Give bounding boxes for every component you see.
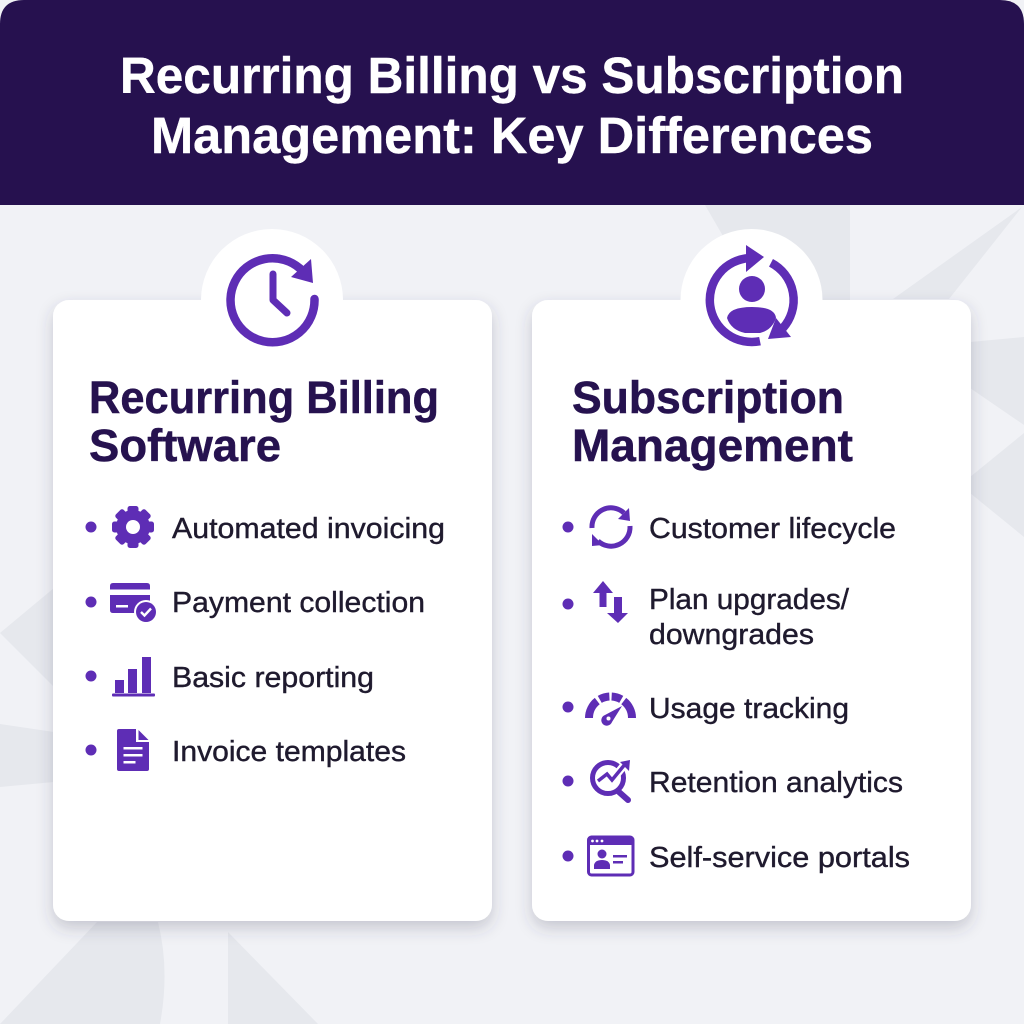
list item: customer lifecycle: Customer lifecycle <box>649 513 896 545</box>
list item: automated invoicing: Automated invoicing <box>172 513 445 545</box>
icon: gear <box>112 506 154 548</box>
list item: retention analytics <box>562 760 903 800</box>
icon: up and down arrows <box>593 581 628 623</box>
header banner <box>0 0 1024 205</box>
list item: usage tracking: Usage tracking <box>649 693 849 725</box>
icon: person in cycle arrows <box>710 245 794 342</box>
heading: recurring billing software: Software <box>89 420 281 471</box>
list item: self-service portals: Self-service portals <box>649 842 910 874</box>
icon: sync arrows <box>592 508 630 546</box>
panel: subscription management <box>532 229 971 921</box>
heading: recurring billing software <box>89 372 439 471</box>
list item: customer lifecycle <box>562 508 896 546</box>
list item: usage tracking <box>562 693 849 726</box>
list item: self-service portals <box>562 837 910 875</box>
heading: recurring billing software: Recurring Billing <box>89 372 439 423</box>
icon: bar chart <box>112 657 155 696</box>
list item: automated invoicing <box>86 506 445 548</box>
list item: invoice templates <box>86 729 406 771</box>
icon: credit card with check <box>110 583 158 624</box>
heading: subscription management: Subscription <box>572 372 844 423</box>
title <box>120 47 904 164</box>
list item: plan upgrades/downgrades: downgrades <box>649 619 814 651</box>
icon: browser profile window <box>588 837 633 875</box>
list item: invoice templates: Invoice templates <box>172 736 406 768</box>
panel: recurring billing software <box>53 229 492 921</box>
list item: payment collection <box>86 583 425 624</box>
icon: gauge <box>589 697 632 726</box>
list item: retention analytics: Retention analytics <box>649 767 903 799</box>
list item: plan upgrades/downgrades <box>562 581 850 651</box>
icon: magnifier with trend <box>592 760 630 800</box>
title: Recurring Billing vs Subscription <box>120 47 904 104</box>
heading: subscription management <box>572 372 853 471</box>
title: Management: Key Differences <box>151 107 873 164</box>
heading: subscription management: Management <box>572 420 853 471</box>
list item: payment collection: Payment collection <box>172 587 425 619</box>
icon: clock with arrow <box>231 258 315 342</box>
list item: plan upgrades/downgrades: Plan upgrades/ <box>649 584 850 616</box>
list item: basic reporting: Basic reporting <box>172 662 374 694</box>
icon: document <box>117 729 149 771</box>
list item: basic reporting <box>86 657 374 696</box>
